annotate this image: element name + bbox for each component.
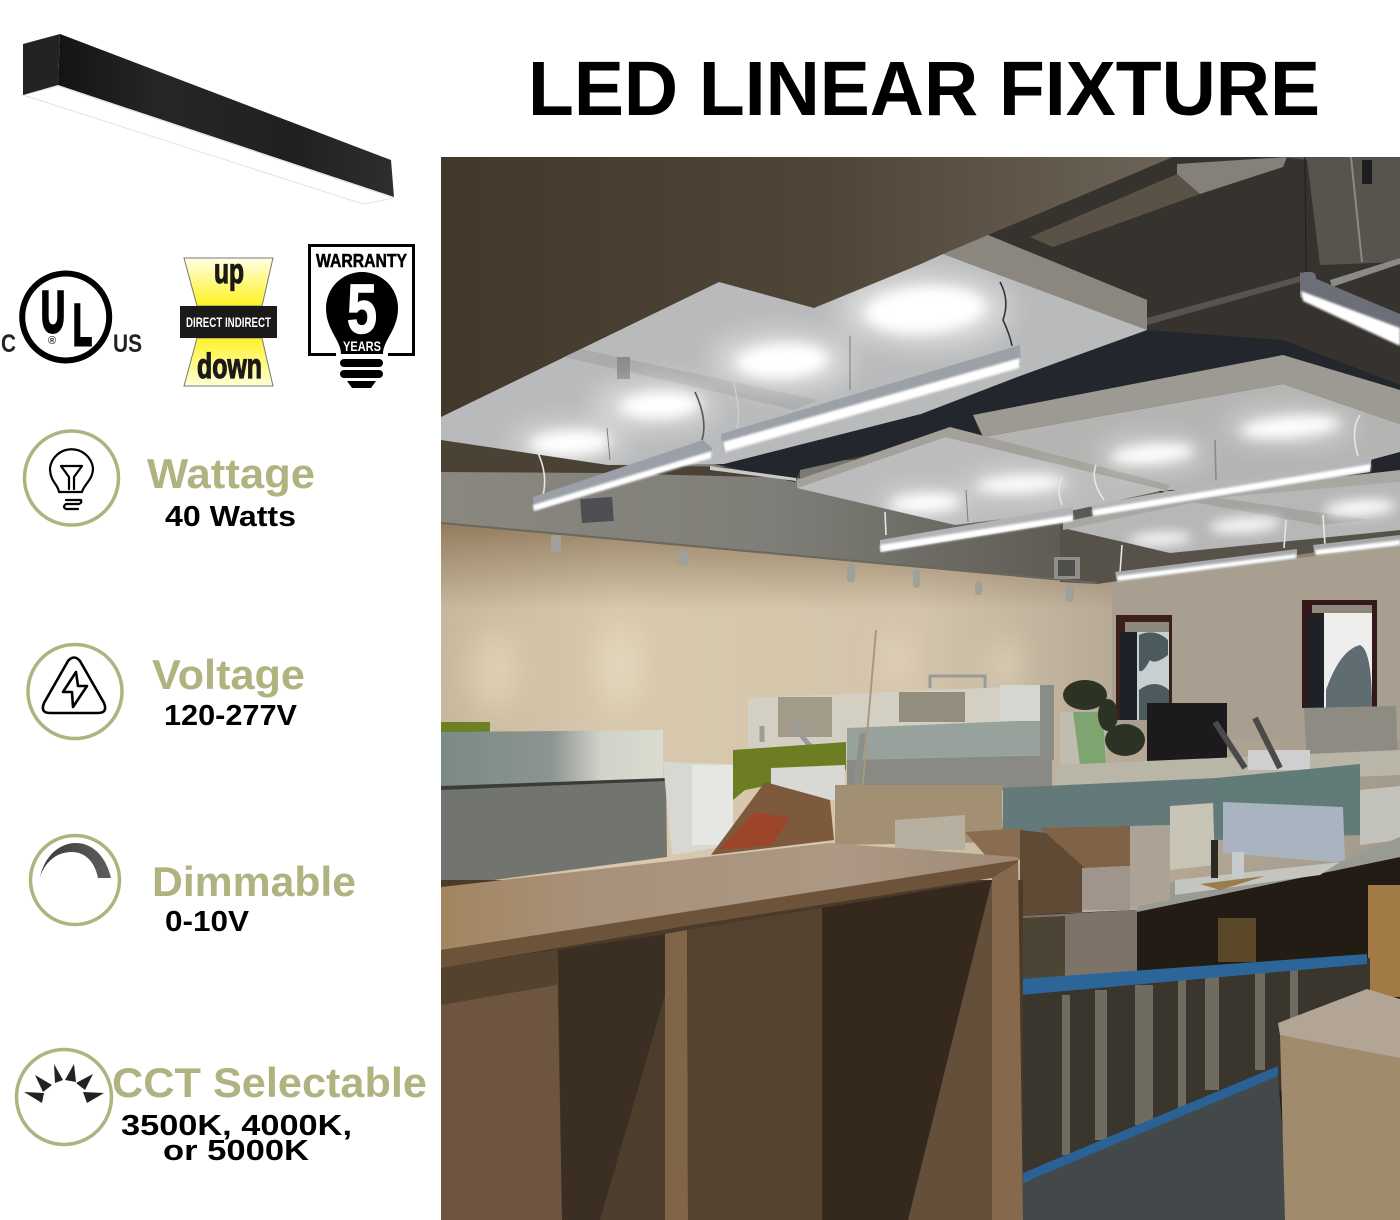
spec: wattage: 40 Watts xyxy=(165,501,296,533)
light glows on ceiling panels xyxy=(529,283,1396,547)
spec: dimmable xyxy=(30,836,356,938)
spec: CCT selectable xyxy=(16,1050,427,1167)
spec: CCT selectable: or 5000K xyxy=(163,1135,309,1167)
badge: cULus mark: L xyxy=(73,293,92,358)
spec: voltage: 120-277V xyxy=(164,700,298,732)
spec: dimmable: 0-10V xyxy=(165,906,250,938)
badge: 5 year warranty bulb: WARRANTY xyxy=(316,251,407,271)
cardboard and pole xyxy=(711,630,876,855)
wall light pools xyxy=(469,634,1022,706)
badge: direct indirect up down: DIRECT INDIRECT xyxy=(186,314,271,330)
left partition xyxy=(441,722,733,887)
title: LED LINEAR FIXTURE xyxy=(528,46,1320,132)
wooden desk and teal screens xyxy=(835,764,1400,870)
wall xyxy=(441,500,1400,920)
spec: wattage: Wattage xyxy=(147,450,315,497)
foreground right cabinet xyxy=(1278,989,1400,1220)
icon: dimmer arc xyxy=(30,836,120,924)
right desk surface and boxes xyxy=(1020,825,1400,1180)
badge: 5 year warranty bulb xyxy=(310,246,414,388)
badge: direct indirect up down: down xyxy=(197,347,262,386)
linear fixtures xyxy=(533,272,1400,581)
dark band behind clouds xyxy=(714,330,1400,505)
ceiling xyxy=(441,157,1173,500)
blue ladder xyxy=(1020,954,1370,1183)
spec: wattage xyxy=(24,431,315,533)
badge: cULus mark: U xyxy=(41,280,65,345)
carpet floor xyxy=(1023,1076,1290,1220)
cloud panel two xyxy=(973,355,1400,490)
badge: cULus mark: ® xyxy=(48,335,56,347)
soffit xyxy=(441,460,1120,584)
spec: CCT selectable: CCT Selectable xyxy=(112,1059,427,1106)
badge: cULus mark xyxy=(1,274,142,360)
badge: cULus mark: C xyxy=(1,330,16,358)
soft halos on ceiling panels xyxy=(510,274,1355,514)
badge: direct indirect up down: up xyxy=(214,252,244,291)
track line xyxy=(441,523,1097,583)
vent xyxy=(580,497,614,523)
track spot lights xyxy=(551,535,1074,602)
badge: 5 year warranty bulb: YEARS xyxy=(343,338,381,354)
back shelves and partitions xyxy=(733,676,1400,800)
product: black linear fixture xyxy=(23,34,394,204)
badge: cULus mark: US xyxy=(113,330,142,358)
icon: light bulb xyxy=(24,431,118,525)
badge: 5 year warranty bulb: 5 xyxy=(347,270,377,348)
icon: electric hazard triangle xyxy=(28,644,122,738)
icon: sunburst xyxy=(16,1050,112,1144)
cloud panel four xyxy=(1063,470,1400,553)
exposed upper ceiling with duct xyxy=(988,157,1400,385)
spec: CCT selectable: 3500K, 4000K, xyxy=(121,1110,352,1142)
foreground wood desk xyxy=(441,843,1023,1220)
spec: voltage xyxy=(28,644,305,738)
spec: voltage: Voltage xyxy=(152,651,305,698)
cloud panel one xyxy=(441,235,1147,465)
suspension wires xyxy=(538,282,1360,573)
cloud panel three xyxy=(797,427,1170,525)
right windows xyxy=(1116,600,1377,720)
photo: office installation xyxy=(441,157,1400,1220)
spec: dimmable: Dimmable xyxy=(152,858,356,905)
badge: direct indirect up down xyxy=(180,252,277,386)
